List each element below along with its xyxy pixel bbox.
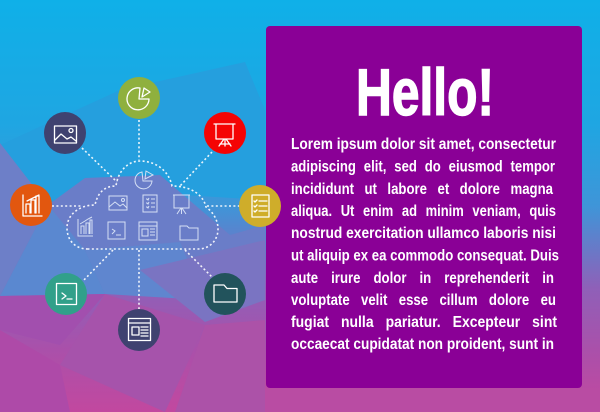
cloud icon: folder bbox=[180, 226, 198, 240]
body text: occaecat cupidatat non proident, sunt in bbox=[291, 336, 554, 353]
cloud icon: bar chart bbox=[78, 217, 93, 236]
icon: image circle bbox=[44, 112, 86, 154]
icon: browser circle bbox=[118, 309, 160, 351]
body text: aute irure dolor in reprehenderit in bbox=[291, 270, 554, 287]
body text bbox=[291, 136, 559, 353]
body text: adipiscing elit, sed do eiusmod tempor bbox=[291, 158, 555, 176]
icon: pie chart circle bbox=[118, 77, 160, 119]
panel: text card bbox=[266, 26, 582, 388]
small cloud icons bbox=[78, 171, 198, 240]
cloud icon: checklist bbox=[143, 195, 157, 212]
cloud outline bbox=[67, 161, 218, 249]
body text: voluptate velit esse cillum dolore eu bbox=[291, 292, 556, 309]
heading: Hello! bbox=[356, 55, 494, 129]
cloud icon: image bbox=[109, 196, 127, 210]
icon: terminal circle bbox=[45, 273, 87, 315]
body text: Lorem ipsum dolor sit amet, consectetur bbox=[291, 136, 556, 153]
icon: bar chart circle bbox=[10, 184, 52, 226]
icon: folder circle bbox=[204, 273, 246, 315]
cloud icon: presentation bbox=[173, 195, 190, 214]
connector lines bbox=[52, 120, 240, 309]
body text: aliqua. Ut enim ad minim veniam, quis bbox=[291, 203, 556, 220]
icon: presentation circle bbox=[204, 112, 246, 154]
cloud icon: browser bbox=[139, 222, 157, 240]
body text: fugiat nulla pariatur. Excepteur sint bbox=[291, 314, 557, 331]
icon: checklist circle bbox=[239, 185, 281, 227]
cloud icon: terminal bbox=[108, 222, 125, 239]
cloud icon: pie chart bbox=[135, 171, 153, 189]
body text: ut aliquip ex ea commodo consequat. Duis bbox=[291, 248, 559, 264]
body text: nostrud exercitation ullamco laboris nisi bbox=[291, 225, 556, 242]
body text: incididunt ut labore et dolore magna bbox=[291, 181, 553, 198]
